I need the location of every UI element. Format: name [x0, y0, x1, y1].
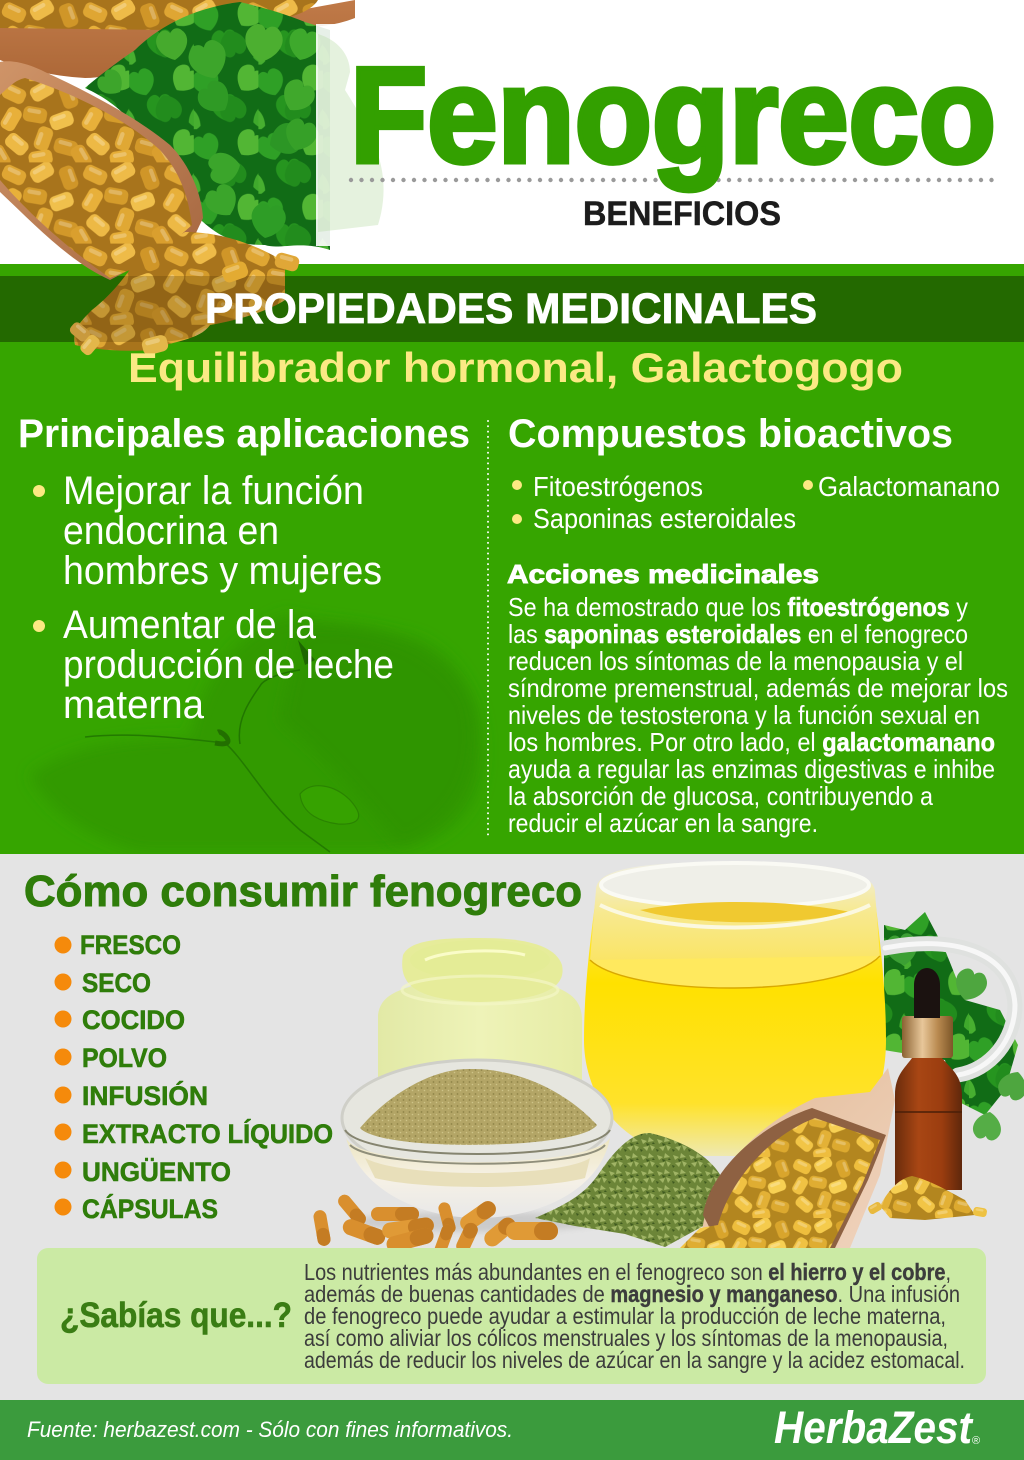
panel: how to consume grey background — [0, 854, 1024, 1400]
compound: galactomannan: Galactomanano — [818, 471, 1000, 502]
subtitle: BENEFICIOS — [583, 195, 781, 233]
heading: did you know: ¿Sabías que...? — [60, 1296, 292, 1335]
logo: HerbaZest: HerbaZest — [774, 1402, 974, 1453]
illustration: mug of tea — [584, 862, 1015, 1156]
heading: medicinal actions: Acciones medicinales — [507, 559, 819, 589]
list text: endocrine function: endocrina en — [63, 509, 279, 553]
illustration: leaves behind mug — [884, 912, 1024, 1142]
banner: dark green band — [0, 276, 1024, 342]
panel: did you know — [37, 1248, 986, 1384]
list: bioactive compounds — [512, 471, 1000, 534]
list: forms of consumption — [54, 930, 333, 1224]
illustration: translucent panel over leaves — [316, 24, 406, 246]
text block: medicinal actions: reducir el azúcar en la sangre. — [508, 808, 818, 838]
illustration: spilled seeds over the band — [68, 232, 300, 357]
list text: milk production — [63, 603, 394, 727]
illustration: ointment jar — [378, 938, 582, 1100]
item: fresh: FRESCO — [80, 930, 181, 960]
list text: endocrine function — [63, 469, 382, 593]
list text: milk production: Aumentar de la — [63, 603, 317, 647]
bullet: galactomannan — [803, 480, 813, 490]
illustration: dropper bottle — [895, 968, 962, 1190]
illustration: seeds under bottle — [867, 1176, 987, 1220]
list text: milk production: producción de leche — [63, 643, 394, 687]
compound: phytoestrogens: Fitoestrógenos — [533, 471, 703, 502]
illustration: scoop with seeds — [680, 1068, 895, 1248]
heading: main applications: Principales aplicaciones — [18, 412, 470, 456]
illustration: wooden bowl with seeds, top left — [0, 0, 355, 78]
illustration: breastfeeding baby background — [30, 615, 482, 852]
item: cooked: COCIDO — [82, 1005, 185, 1035]
text block: medicinal actions: Se ha demostrado que los fitoestrógenos y — [508, 592, 968, 622]
bullet: phytoestrogens — [512, 480, 522, 490]
text block: medicinal actions: niveles de testosterona y la función sexual en — [508, 700, 980, 730]
footer source: Fuente: herbazest.com - Sólo con fines informativos. — [27, 1417, 513, 1442]
illustration: capsules — [312, 1192, 558, 1257]
list text: endocrine function: hombres y mujeres — [63, 549, 382, 593]
text block: medicinal actions: la absorción de glucosa, contribuyendo a — [508, 781, 933, 811]
item: liquid extract: EXTRACTO LÍQUIDO — [82, 1118, 333, 1149]
text block: medicinal actions — [508, 592, 1008, 838]
text block: did you know: Los nutrientes más abundantes en el fenogreco son el hierro y el cobre, — [304, 1259, 951, 1285]
list text: endocrine function: Mejorar la función — [63, 469, 364, 513]
heading: bioactive compounds: Compuestos bioactivos — [508, 412, 953, 456]
mug handle — [885, 944, 1015, 1075]
item: dried: SECO — [82, 968, 151, 998]
list text: milk production: materna — [63, 683, 205, 727]
text block: medicinal actions: reducen los síntomas de la menopausia y el — [508, 646, 963, 676]
subheading: main properties: Equilibrador hormonal, Galactogogo — [128, 344, 903, 391]
item: capsules: CÁPSULAS — [82, 1193, 218, 1224]
text block: did you know: además de buenas cantidades de magnesio y manganeso. Una infusión — [304, 1281, 960, 1307]
item: powder: POLVO — [82, 1043, 167, 1073]
bullet: saponins — [512, 514, 522, 524]
text block: did you know — [304, 1259, 965, 1373]
logo: HerbaZest: ® — [972, 1435, 980, 1447]
footer bar — [0, 1400, 1024, 1460]
list: applications — [33, 469, 394, 727]
heading: medicinal properties: PROPIEDADES MEDICINALES — [205, 285, 817, 333]
text block: medicinal actions: las saponinas esteroidales en el fenogreco — [508, 619, 968, 649]
panel: medicinal properties green background — [0, 264, 1024, 854]
column divider — [487, 421, 489, 835]
heading: how to consume: Cómo consumir fenogreco — [24, 867, 582, 916]
illustration: fenugreek leaves — [85, 2, 330, 250]
item: ointment: UNGÜENTO — [82, 1157, 231, 1187]
mug upper glass — [590, 862, 880, 975]
text block: medicinal actions: los hombres. Por otro lado, el galactomanano — [508, 727, 995, 757]
compound: saponins: Saponinas esteroidales — [533, 503, 796, 534]
dotted rule under title — [351, 178, 995, 182]
illustration: wooden scoop of seeds — [0, 61, 203, 280]
mug body — [584, 890, 886, 1156]
item: dried — [54, 968, 151, 998]
illustration: dried herbs — [535, 1133, 722, 1247]
illustration: glass bowl of powder — [342, 1060, 612, 1232]
item: infusion: INFUSIÓN — [82, 1080, 208, 1111]
bullet: applications 1 — [33, 485, 45, 497]
bullet: applications 2 — [33, 620, 45, 632]
